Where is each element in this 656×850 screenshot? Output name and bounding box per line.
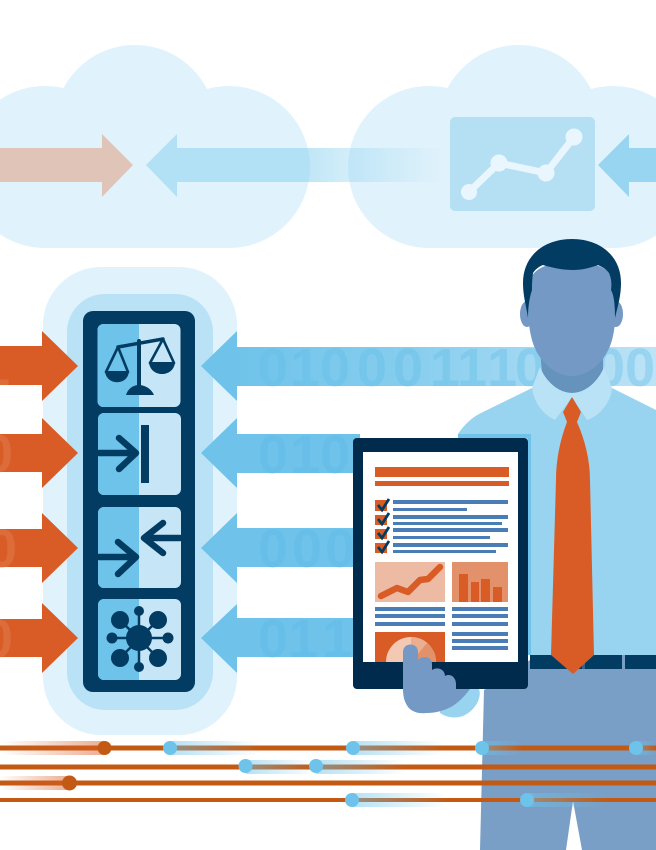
arrow: blue at right of cloud — [598, 134, 656, 197]
arrow: orange 3 — [0, 513, 78, 583]
man: collar — [532, 367, 612, 420]
arrow: blue data stream 4: 011 — [258, 609, 352, 669]
arrow: blue data stream 3: 000 — [258, 519, 355, 579]
man: hair — [523, 239, 621, 318]
tablet: pie chart — [375, 632, 445, 662]
data line 3 — [0, 776, 656, 790]
man: trousers — [480, 660, 656, 850]
cloud: left — [0, 45, 310, 248]
tablet: screen — [363, 452, 518, 662]
icon: scales — [98, 324, 180, 407]
arrow: blue data stream 3 — [201, 513, 360, 583]
tablet: header bars — [375, 467, 509, 486]
tablet: bar chart — [452, 562, 508, 602]
icon: opposing arrows — [98, 507, 181, 588]
chart line — [461, 128, 582, 200]
man: hand pointing — [403, 644, 470, 713]
man: sleeve under hand — [440, 689, 480, 717]
arrow: faded orange in cloud — [0, 134, 133, 197]
cloud: right — [348, 45, 656, 248]
tablet: line chart — [375, 562, 445, 602]
orange arrows — [0, 331, 78, 673]
tablet: checklist lines — [393, 500, 508, 553]
man: shirt — [458, 388, 656, 656]
arrow: blue data stream 1: 0100011100000 — [258, 338, 655, 398]
arrow: blue data stream 4 — [201, 604, 360, 673]
man: ears — [520, 301, 623, 327]
arrow: blue data stream 2: 010 — [258, 425, 350, 485]
panel: outer halo — [43, 267, 237, 735]
man: face — [528, 262, 616, 376]
chart card in cloud — [450, 117, 595, 211]
blue arrows — [201, 331, 656, 673]
tablet — [353, 438, 528, 689]
arrow: orange 4 — [0, 603, 78, 673]
data line 1 — [0, 741, 656, 755]
icon: arrow to barrier — [98, 413, 181, 495]
man figure — [353, 239, 656, 850]
man: tie — [551, 397, 594, 674]
arrow: orange 1 — [0, 331, 78, 401]
tablet glow on shirt — [458, 434, 531, 655]
arrow: orange 2 — [0, 418, 78, 488]
panel: inner halo — [67, 294, 213, 710]
panel: dark icon column — [83, 311, 195, 692]
data lines — [0, 741, 656, 807]
tablet: checklist boxes — [375, 499, 389, 553]
man: neck — [540, 350, 603, 393]
icon: network hub — [98, 599, 181, 680]
arrow: blue data stream 2 — [201, 418, 360, 488]
man: belt — [530, 655, 656, 669]
data line 2 — [0, 759, 656, 774]
data line 4 — [0, 793, 656, 807]
tablet: text lines — [375, 607, 508, 650]
arrow: faded blue crossing clouds — [146, 134, 442, 197]
